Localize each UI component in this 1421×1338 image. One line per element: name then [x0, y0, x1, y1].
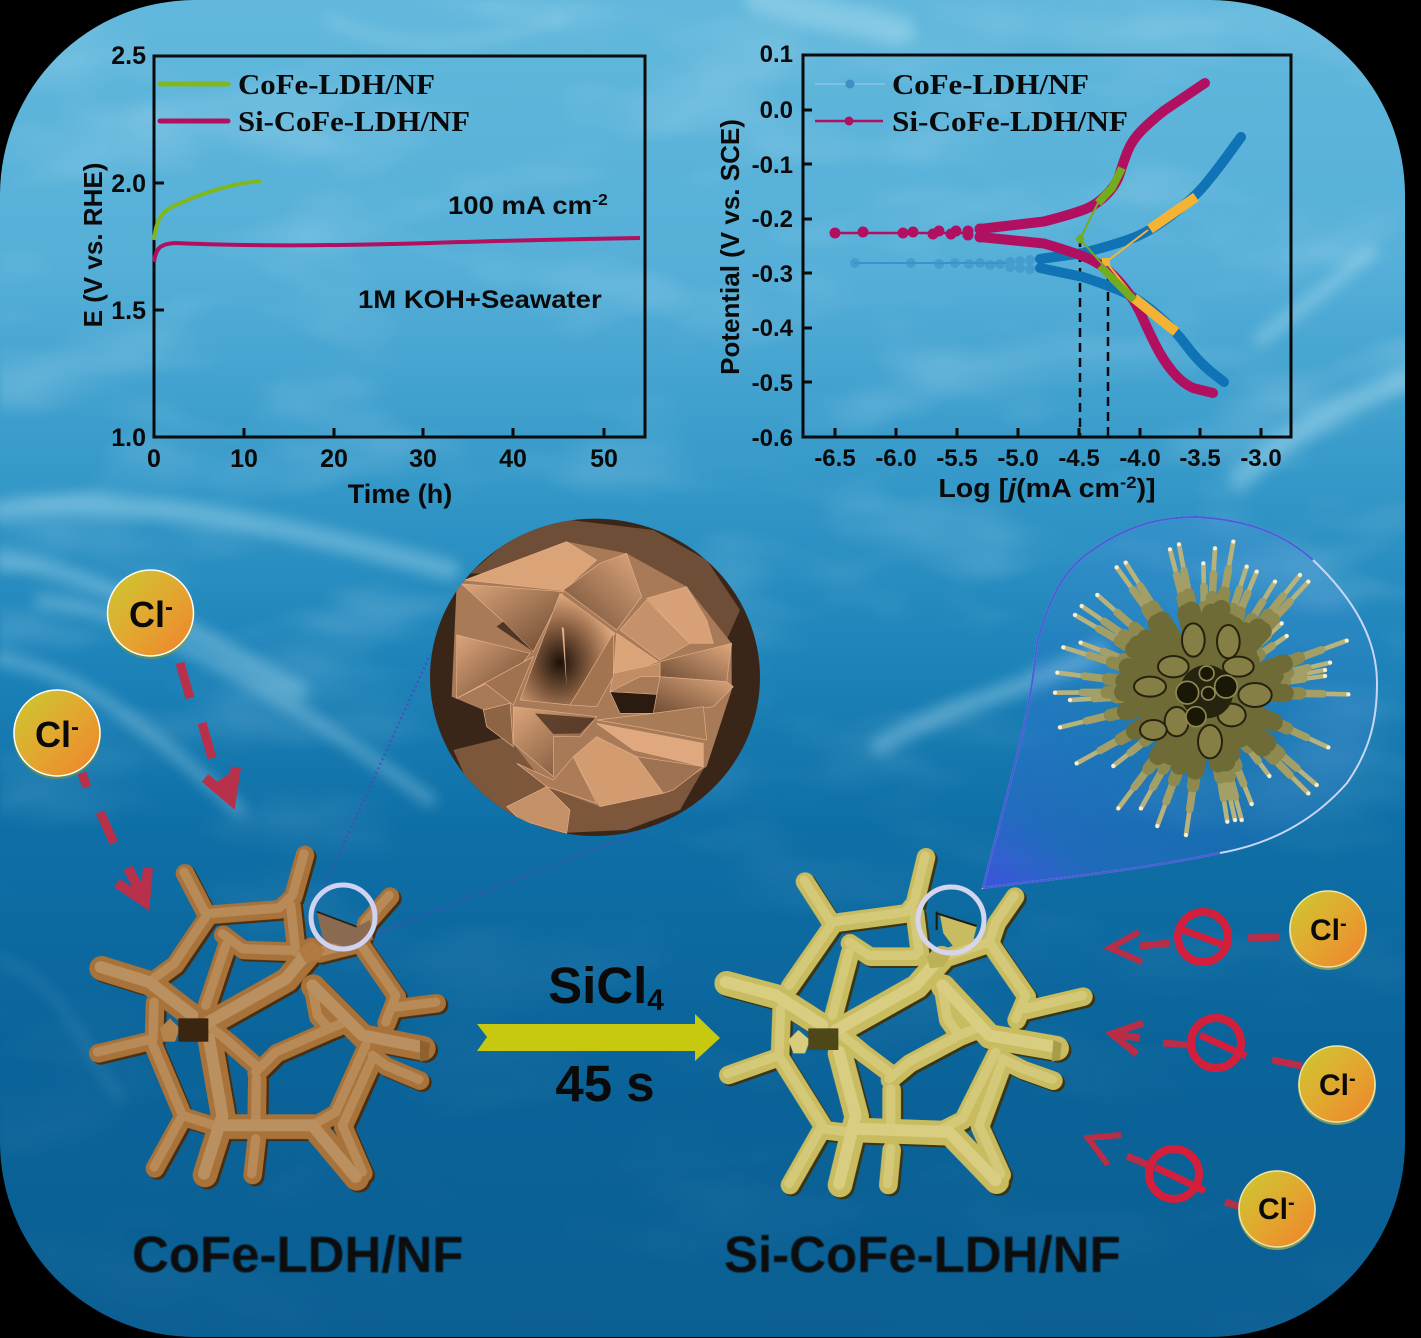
legend: Si-CoFe-LDH/NF — [238, 106, 470, 138]
dashed arrow: Cl- into CoFe foam (2) — [82, 773, 148, 902]
ion: Cl- top left: - — [165, 594, 173, 621]
structure: CoFe-LDH nickel foam (brown) — [97, 854, 439, 1180]
blocked arrow: Cl- repelled (top) — [1110, 912, 1279, 962]
y tick labels: -0.1 — [752, 152, 793, 179]
ring: right magnifier — [918, 887, 984, 953]
ion: Cl- right middle — [1298, 1046, 1376, 1125]
ion: Cl- right middle: - — [1349, 1068, 1356, 1090]
ion: Cl- left — [13, 690, 101, 779]
curve: Si-CoFe-LDH/NF — [835, 83, 1213, 393]
y tick labels: -0.6 — [752, 425, 793, 452]
y tick labels: 0.0 — [760, 97, 793, 124]
ion: Cl- right top: - — [1340, 913, 1347, 935]
y tick labels: -0.5 — [752, 370, 793, 397]
x axis title: -2 — [1120, 473, 1137, 492]
label: CoFe-LDH/NF: CoFe-LDH/NF — [132, 1226, 463, 1283]
blocked arrow: Cl- repelled (middle) — [1110, 1018, 1302, 1068]
no symbol — [1149, 1149, 1205, 1199]
y tick labels: -0.3 — [752, 261, 793, 288]
legend: CoFe-LDH/NF — [238, 69, 435, 101]
ion: Cl- top left: Cl — [129, 594, 165, 635]
callout: Si-CoFe urchin teardrop — [983, 517, 1377, 888]
curve: CoFe-LDH/NF — [154, 181, 261, 240]
x tick labels: -6.5 — [814, 445, 856, 472]
y tick labels: 2.5 — [111, 42, 146, 70]
structure: Si-CoFe-LDH nickel foam (yellow) — [726, 856, 1086, 1187]
y tick labels: -0.2 — [752, 206, 793, 233]
label: Si-CoFe-LDH/NF: Si-CoFe-LDH/NF — [724, 1226, 1121, 1283]
ion: Cl- right top: Cl — [1310, 914, 1340, 947]
chart: Tafel polarization — [715, 41, 1291, 503]
x tick labels: -3.0 — [1240, 445, 1282, 472]
y tick labels: 0.1 — [760, 41, 793, 68]
ion: Cl- left: Cl — [35, 714, 71, 755]
curve: Si-CoFe-LDH/NF — [154, 238, 640, 262]
label: 45 s: 45 s — [555, 1055, 655, 1112]
ring: left magnifier — [311, 885, 375, 949]
no symbol — [1178, 912, 1228, 962]
x tick labels: 40 — [499, 445, 527, 473]
ion: Cl- left: - — [71, 714, 79, 741]
annotation: current density: -2 — [592, 191, 608, 209]
arrow: SiCl4 reaction arrow — [477, 1014, 720, 1061]
x tick labels: 50 — [590, 445, 618, 473]
y tick labels: 2.0 — [111, 170, 146, 198]
x tick labels: -4.5 — [1058, 445, 1100, 472]
ion: Cl- right bottom: Cl — [1258, 1193, 1288, 1226]
flower body — [452, 542, 732, 807]
x tick labels: -5.5 — [936, 445, 978, 472]
ion: Cl- right middle: Cl — [1319, 1069, 1349, 1102]
label: SiCl4: SiCl — [548, 957, 647, 1014]
y tick labels — [111, 42, 146, 452]
ion: Cl- right top — [1289, 891, 1367, 970]
x tick labels: -6.0 — [875, 445, 917, 472]
y tick labels: 1.0 — [111, 424, 146, 452]
x tick labels: 20 — [320, 445, 348, 473]
x tick labels: -5.0 — [997, 445, 1039, 472]
x axis title: )] — [1137, 473, 1156, 503]
legend: CoFe-LDH/NF — [892, 69, 1089, 101]
x tick labels — [814, 445, 1282, 472]
petals — [457, 542, 733, 833]
y tick labels — [752, 41, 794, 452]
label: SiCl4: 4 — [647, 984, 664, 1017]
ion: Cl- right bottom — [1238, 1171, 1316, 1250]
x tick labels: 10 — [230, 445, 258, 473]
chart: stability E vs time — [78, 42, 645, 509]
dashed corrosion current lines — [1080, 238, 1108, 437]
blocked arrow: Cl- repelled (bottom) — [1088, 1135, 1238, 1206]
y axis title: Potential (V vs. SCE) — [715, 119, 745, 375]
ion: Cl- top left — [106, 570, 194, 659]
x tick labels: 0 — [147, 445, 161, 473]
dotted zoom guide lines — [322, 655, 640, 935]
legend — [815, 69, 1128, 138]
plot frame — [154, 56, 645, 437]
x tick labels — [147, 445, 618, 473]
Tafel fit: green — [1075, 168, 1134, 300]
annotation: current density: 100 mA cm — [448, 191, 592, 220]
y tick labels: -0.4 — [752, 315, 794, 342]
urchin nanostructure — [1055, 542, 1348, 835]
Tafel fit: yellow — [1106, 197, 1196, 332]
micrograph: CoFe-LDH flower — [430, 519, 760, 836]
y axis title: E (V vs. RHE) — [78, 163, 108, 327]
x tick labels: -4.0 — [1119, 445, 1161, 472]
x axis title: Time (h) — [348, 479, 452, 509]
curve: CoFe-LDH/NF — [855, 137, 1241, 382]
plot frame — [803, 55, 1291, 437]
ion: Cl- right bottom: - — [1288, 1192, 1295, 1214]
no symbol — [1191, 1018, 1246, 1068]
legend — [160, 69, 470, 138]
annotation: electrolyte: 1M KOH+Seawater — [358, 285, 602, 314]
legend: Si-CoFe-LDH/NF — [892, 106, 1128, 138]
x tick labels: 30 — [409, 445, 437, 473]
y tick labels: 1.5 — [111, 297, 146, 325]
x axis title: Log [j(mA cm — [938, 473, 1120, 503]
dashed arrow: Cl- into CoFe foam (1) — [180, 663, 236, 807]
spike tips — [1055, 542, 1348, 835]
x tick labels: -3.5 — [1179, 445, 1221, 472]
